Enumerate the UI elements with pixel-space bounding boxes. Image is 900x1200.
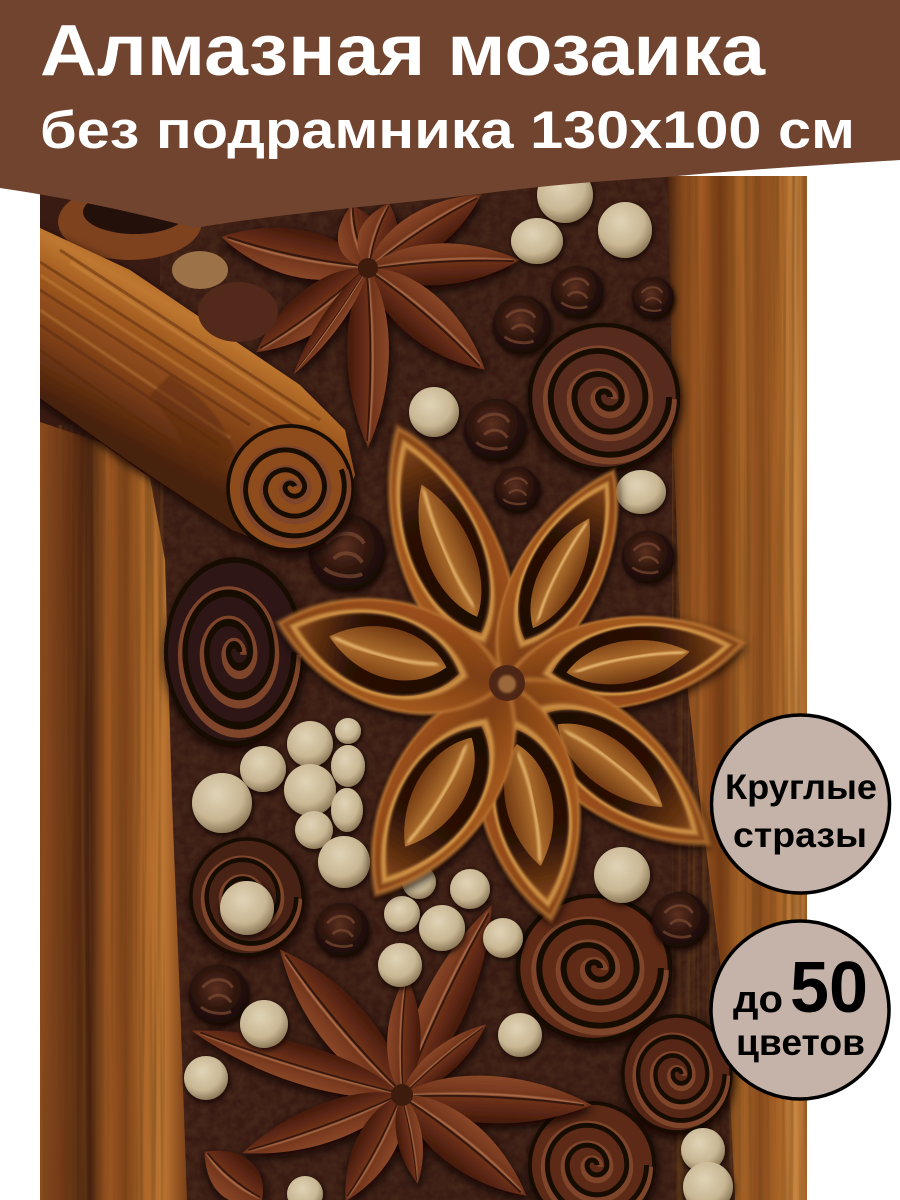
subtitle: без подрамника 130х100 см	[40, 101, 855, 160]
swirl: top left	[58, 200, 202, 260]
badge: round rhinestones	[712, 715, 890, 893]
wood fibre: right	[672, 176, 807, 1200]
raisins	[189, 266, 708, 1025]
cinnamon roll: diagonal	[40, 228, 369, 567]
badge: up to 50 colours	[711, 921, 889, 1099]
wood fibre: left	[40, 425, 165, 1200]
badge: up to 50 colours: 50	[790, 948, 868, 1028]
picture: anise and cinnamon relief	[40, 167, 807, 1200]
cinnamon stick: right vertical	[668, 176, 807, 1200]
beads	[184, 167, 733, 1200]
cinnamon stick: left vertical	[40, 422, 187, 1200]
star anise: top	[216, 177, 521, 448]
star anise: bottom	[186, 896, 593, 1200]
badge: up to 50 colours: до	[733, 979, 783, 1021]
badge: up to 50 colours: цветов	[736, 1022, 865, 1063]
badge: round rhinestones: стразы	[733, 816, 867, 855]
rose swirls	[166, 325, 731, 1200]
blob: tan stones near top left	[172, 251, 278, 342]
title: Алмазная мозаика	[40, 11, 766, 91]
header banner	[0, 0, 900, 228]
dark brown base	[40, 176, 807, 1200]
large star anise: centre	[266, 410, 749, 927]
badge: round rhinestones: Круглые	[725, 768, 877, 807]
grain texture on base	[160, 176, 740, 1200]
